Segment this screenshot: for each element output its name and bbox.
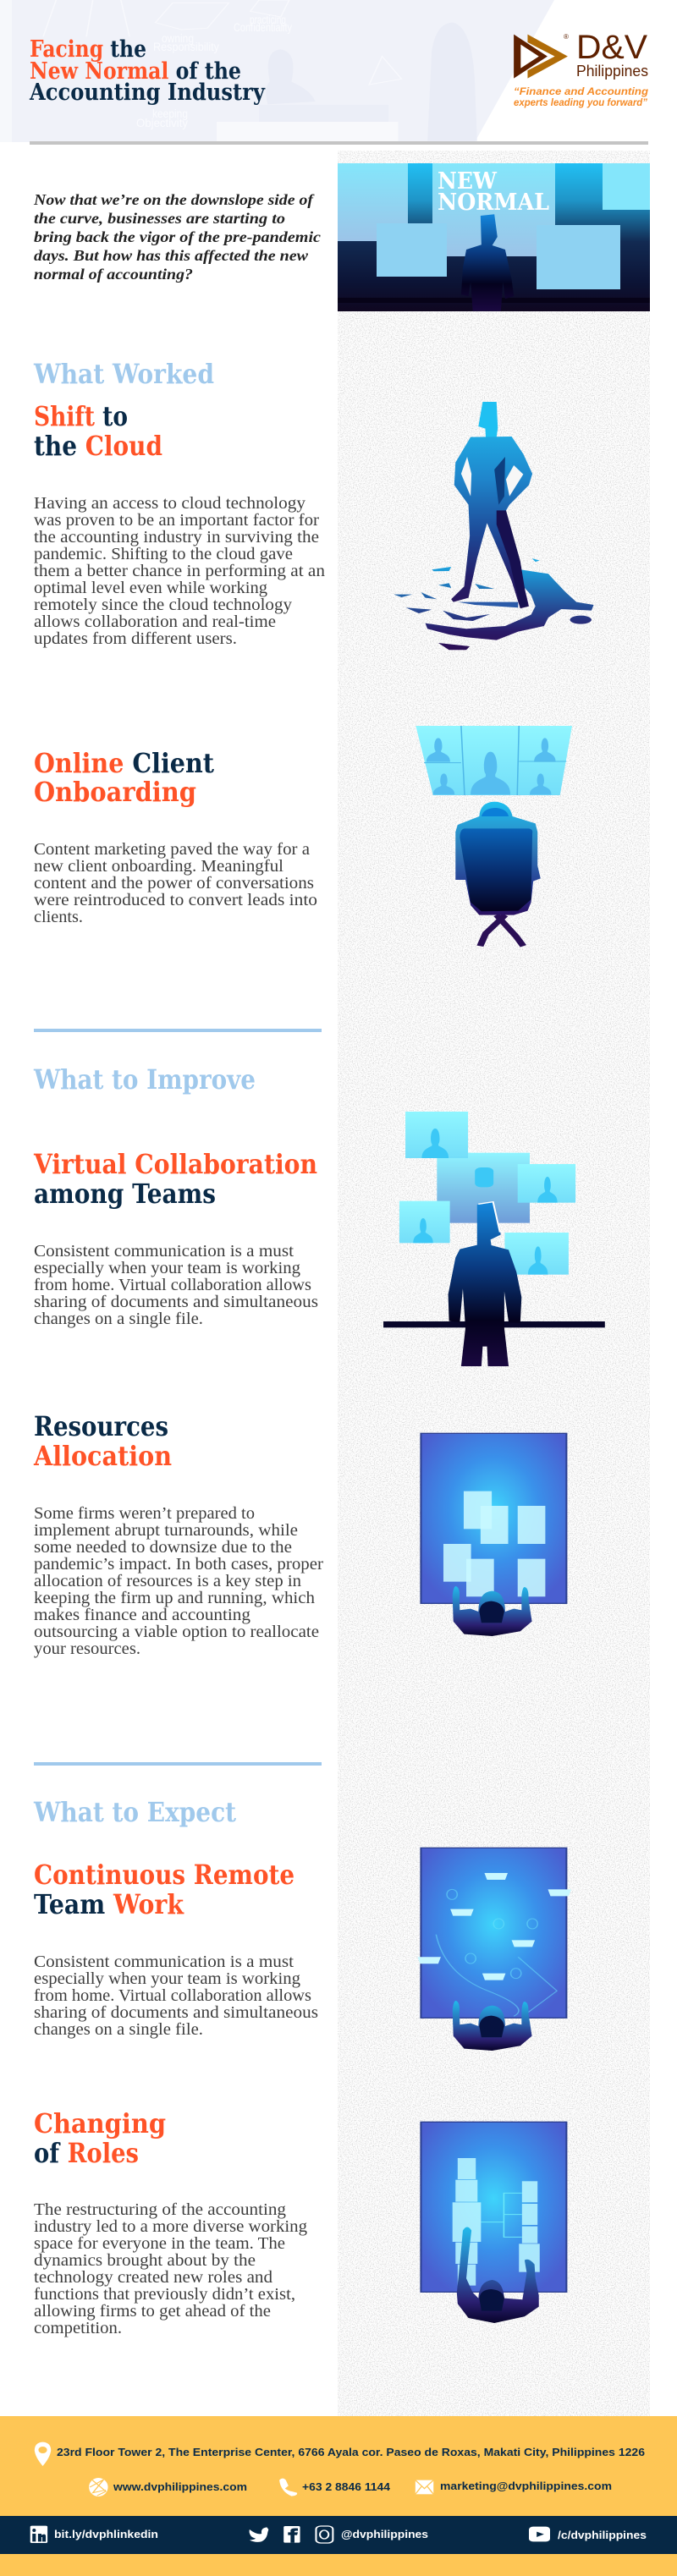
email: marketing@dvphilippines.com — [440, 2480, 612, 2492]
icon: phone — [279, 2479, 297, 2496]
panel: textured right column — [338, 151, 650, 2416]
text: online client onboarding: new client onboarding. Meaningful — [34, 858, 284, 876]
text: resources allocation: some needed to downsize due to the — [34, 1539, 292, 1557]
logo — [514, 29, 649, 108]
illustration: person at screen with org chart — [421, 2122, 566, 2323]
divider — [34, 1029, 322, 1032]
light screen panels — [338, 163, 650, 289]
text: shift to the cloud: was proven to be an important factor for — [34, 512, 320, 530]
person in chair — [455, 802, 541, 946]
heading: continuous remote team work: Team Work — [34, 1888, 184, 1920]
network pattern — [436, 1889, 557, 2016]
text: changing of roles: space for everyone in the team. The — [34, 2235, 285, 2253]
document cards — [443, 1491, 545, 1596]
icon: map pin — [35, 2442, 51, 2466]
text: virtual collaboration: sharing of documents and simultaneous — [34, 1293, 318, 1311]
intro text: days. But how has this affected the new — [34, 247, 309, 264]
text: resources allocation: allocation of resources is a key step in — [34, 1573, 301, 1590]
icon: globe — [89, 2478, 108, 2496]
icon: youtube — [529, 2527, 550, 2541]
heading: resources allocation — [33, 1410, 172, 1472]
text: resources allocation: outsourcing a viable option to reallocate — [34, 1623, 319, 1641]
text: continuous remote team work: changes on a single file. — [34, 2021, 203, 2039]
intro text: Now that we’re on the downslope side of — [33, 191, 315, 208]
text: resources allocation: keeping the firm up and running, which — [34, 1590, 315, 1607]
heading: virtual collaboration: among Teams — [34, 1178, 216, 1210]
shadow puddle — [394, 558, 594, 650]
header rule — [30, 141, 648, 145]
text: online client onboarding — [34, 841, 317, 926]
text: resources allocation: makes finance and accounting — [34, 1607, 250, 1624]
heading: shift to the cloud — [34, 400, 162, 462]
illustration: person at screen with small tiles — [417, 1848, 571, 2051]
head — [478, 402, 498, 437]
heading: online client onboarding — [34, 747, 214, 808]
heading: changing of roles: of Roles — [34, 2137, 139, 2169]
text: shift to the cloud: pandemic. Shifting to the cloud gave — [34, 546, 293, 563]
logo: “Finance and Accounting — [514, 85, 649, 97]
illustration: standing person with shadow — [394, 402, 594, 650]
title: Accounting Industry — [29, 80, 266, 106]
heading: continuous remote team work: Continuous Remote — [34, 1859, 294, 1891]
illustration: person at screen with cards — [421, 1433, 566, 1636]
intro text: bring back the vigor of the pre-pandemic — [34, 228, 321, 245]
intro text: normal of accounting? — [34, 266, 193, 283]
floating screens — [399, 1112, 575, 1275]
intro text — [33, 191, 321, 283]
icon: envelope — [416, 2480, 433, 2494]
person with raised arms — [457, 2227, 539, 2323]
text: virtual collaboration — [34, 1243, 318, 1328]
heading: continuous remote team work — [34, 1859, 294, 1920]
text: virtual collaboration: Consistent communication is a must — [34, 1243, 294, 1261]
heading: resources allocation: Allocation — [33, 1440, 172, 1472]
linkedin link: bit.ly/dvphlinkedin — [54, 2528, 158, 2540]
illustration: new normal: NEW — [438, 168, 498, 195]
person from above — [453, 2001, 532, 2051]
intro text: the curve, businesses are starting to — [34, 210, 285, 227]
text: shift to the cloud: Having an access to cloud technology — [34, 495, 305, 513]
section heading: what worked: What Worked — [33, 358, 214, 390]
video call screen — [416, 726, 572, 795]
text: resources allocation — [34, 1505, 324, 1658]
heading: shift to the cloud: Shift to — [34, 400, 128, 432]
text: changing of roles: competition. — [34, 2320, 122, 2337]
text: continuous remote team work: especially when your team is working — [34, 1970, 300, 1988]
body — [451, 437, 532, 608]
text: resources allocation: your resources. — [34, 1640, 140, 1658]
text: virtual collaboration: from home. Virtual collaboration allows — [34, 1277, 311, 1294]
header background — [0, 0, 677, 142]
text: online client onboarding: content and the power of conversations — [34, 875, 314, 893]
small tiles — [417, 1873, 571, 1980]
text: changing of roles: The restructuring of the accounting — [34, 2201, 286, 2219]
person silhouette — [461, 214, 514, 311]
header background: Objectivity — [136, 116, 188, 129]
text: online client onboarding: clients. — [34, 909, 83, 926]
header background: Responsibility — [153, 40, 219, 53]
text: resources allocation: pandemic’s impact. In both cases, proper — [34, 1556, 324, 1574]
text: continuous remote team work: from home. Virtual collaboration allows — [34, 1987, 311, 2005]
header background: practicing — [250, 13, 286, 26]
text: continuous remote team work: Consistent communication is a must — [34, 1953, 294, 1971]
person — [449, 1202, 521, 1366]
text: online client onboarding: were reintroduced to convert leads into — [34, 892, 317, 909]
text: virtual collaboration: especially when your team is working — [34, 1260, 300, 1277]
text: resources allocation: Some firms weren’t prepared to — [34, 1505, 255, 1523]
text: continuous remote team work — [34, 1953, 318, 2039]
icon: instagram — [316, 2526, 333, 2543]
icon: linkedin — [30, 2526, 47, 2543]
title: Facing the — [30, 36, 146, 63]
text: shift to the cloud: optimal level even while working — [34, 579, 267, 597]
text: changing of roles — [34, 2201, 307, 2337]
heading: virtual collaboration: Virtual Collaboration — [33, 1148, 317, 1180]
text: shift to the cloud — [34, 495, 325, 648]
text: changing of roles: functions that previously didn’t exist, — [34, 2286, 295, 2304]
heading: changing of roles — [34, 2107, 166, 2169]
text: changing of roles: industry led to a more diverse working — [34, 2218, 307, 2236]
instagram handle: @dvphilippines — [341, 2528, 428, 2540]
text: virtual collaboration: changes on a single file. — [34, 1310, 203, 1328]
person from above — [453, 1586, 532, 1636]
org chart blocks — [453, 2158, 540, 2286]
heading: online client onboarding: Online Client — [34, 747, 214, 779]
text: shift to the cloud: updates from different users. — [34, 630, 237, 648]
logo: D&V — [576, 29, 647, 66]
heading: resources allocation: Resources — [34, 1410, 168, 1442]
title: New Normal of the — [30, 58, 241, 85]
text: changing of roles: dynamics brought about by the — [34, 2252, 256, 2270]
logo: Philippines — [576, 63, 648, 80]
text: changing of roles: technology created new roles and — [34, 2269, 272, 2287]
social bar — [0, 2516, 677, 2554]
illustration: video call and person in chair — [416, 726, 572, 946]
icon: twitter — [250, 2527, 268, 2542]
text: shift to the cloud: allows collaboration and real-time — [34, 613, 276, 631]
text: online client onboarding: Content marketing paved the way for a — [34, 841, 310, 859]
header background: keeping — [152, 107, 188, 120]
text: changing of roles: allowing firms to get ahead of the — [34, 2303, 271, 2321]
text: shift to the cloud: remotely since the cloud technology — [34, 596, 292, 614]
header background: owning — [162, 31, 194, 45]
icon: logo arrows — [514, 35, 568, 79]
heading: shift to the cloud: the Cloud — [34, 430, 162, 462]
website: www.dvphilippines.com — [113, 2480, 247, 2493]
desk — [383, 1321, 605, 1327]
text: continuous remote team work: sharing of documents and simultaneous — [34, 2004, 318, 2022]
heading: online client onboarding: Onboarding — [34, 776, 196, 808]
header background: Confidentiality — [234, 20, 292, 34]
section heading: what to improve: What to Improve — [33, 1063, 256, 1096]
logo: experts leading you forward” — [514, 96, 647, 108]
illustration: person with floating screens — [383, 1112, 605, 1366]
heading: changing of roles: Changing — [34, 2107, 166, 2139]
illustration: new normal: NORMAL — [438, 189, 549, 216]
youtube channel: /c/dvphilippines — [558, 2529, 647, 2541]
phone number: +63 2 8846 1144 — [302, 2480, 391, 2493]
heading: virtual collaboration — [33, 1148, 317, 1210]
icon: facebook — [283, 2526, 300, 2543]
footer contact panel — [0, 2416, 677, 2576]
address: 23rd Floor Tower 2, The Enterprise Center, 6766 Ayala cor. Paseo de Roxas, Makati City, Philippines 1226 — [57, 2446, 645, 2458]
divider — [34, 1762, 322, 1766]
logo: ® — [564, 33, 569, 41]
text: shift to the cloud: them a better chance in performing at an — [34, 563, 325, 580]
title — [29, 36, 266, 106]
text: resources allocation: implement abrupt turnarounds, while — [34, 1522, 298, 1540]
section heading: what to expect: What to Expect — [33, 1796, 236, 1828]
text: shift to the cloud: the accounting industry in surviving the — [34, 529, 319, 547]
illustration: new normal — [338, 163, 650, 311]
